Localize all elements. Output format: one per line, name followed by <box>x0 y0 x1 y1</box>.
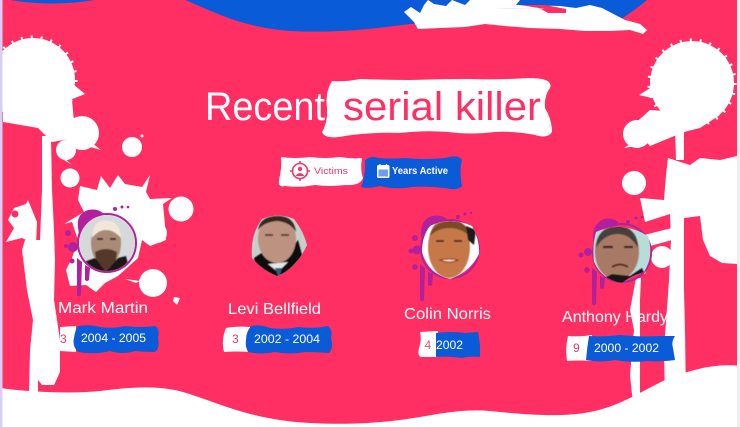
victims count: Colin Norris <box>418 331 438 357</box>
years active label: Years Active <box>392 166 448 177</box>
years: Colin Norris <box>436 332 480 358</box>
years: Mark Martin: 2004 - 2005 <box>81 331 146 345</box>
purple splat <box>64 206 136 296</box>
title white highlight <box>322 78 552 137</box>
name: Colin Norris: Colin Norris <box>404 306 491 323</box>
victims count: Levi Bellfield <box>223 327 250 352</box>
victims label: Victims <box>314 166 348 177</box>
name: Anthony Hardy: Anthony Hardy <box>562 309 668 326</box>
right tree splatter <box>622 40 737 404</box>
person: Mark Martin <box>64 206 136 296</box>
victims count: Mark Martin <box>60 326 76 352</box>
person: Anthony Hardy <box>578 216 654 306</box>
victims count: Anthony Hardy: 9 <box>573 341 580 355</box>
years: Anthony Hardy <box>586 335 675 362</box>
victims count: Levi Bellfield: 3 <box>232 332 239 346</box>
purple splat <box>578 216 651 306</box>
years: Mark Martin <box>74 325 159 353</box>
page edge right <box>737 0 740 427</box>
title <box>205 78 552 137</box>
bottom white wave <box>0 365 740 427</box>
page edge left <box>0 0 2 427</box>
person: Colin Norris <box>408 212 482 302</box>
title: serial killer <box>343 85 541 129</box>
portrait <box>422 221 480 279</box>
name: Levi Bellfield: Levi Bellfield <box>228 301 321 318</box>
person: Levi Bellfield portrait <box>252 216 307 276</box>
legend: years active pill <box>361 156 462 189</box>
legend <box>279 156 462 189</box>
top blue wave <box>10 0 647 32</box>
name: Mark Martin: Mark Martin <box>58 300 148 317</box>
years: Levi Bellfield: 2002 - 2004 <box>254 332 320 346</box>
icon: target person <box>290 161 310 181</box>
central white splatter <box>64 175 194 305</box>
title text: Recent <box>205 85 325 129</box>
purple splat <box>408 212 479 302</box>
years: Colin Norris: 2002 <box>436 338 463 352</box>
victims count: Anthony Hardy <box>566 335 592 361</box>
portrait <box>79 215 135 273</box>
victims count: Mark Martin: 3 <box>60 332 67 346</box>
legend: victims pill <box>279 157 363 187</box>
portrait <box>593 226 650 283</box>
left tree splatter <box>0 37 144 396</box>
victims count: Colin Norris: 4 <box>424 338 432 352</box>
years: Anthony Hardy: 2000 - 2002 <box>594 341 659 355</box>
years: Levi Bellfield <box>246 325 332 354</box>
top white brush splatter <box>404 0 647 34</box>
icon: calendar <box>377 164 390 178</box>
